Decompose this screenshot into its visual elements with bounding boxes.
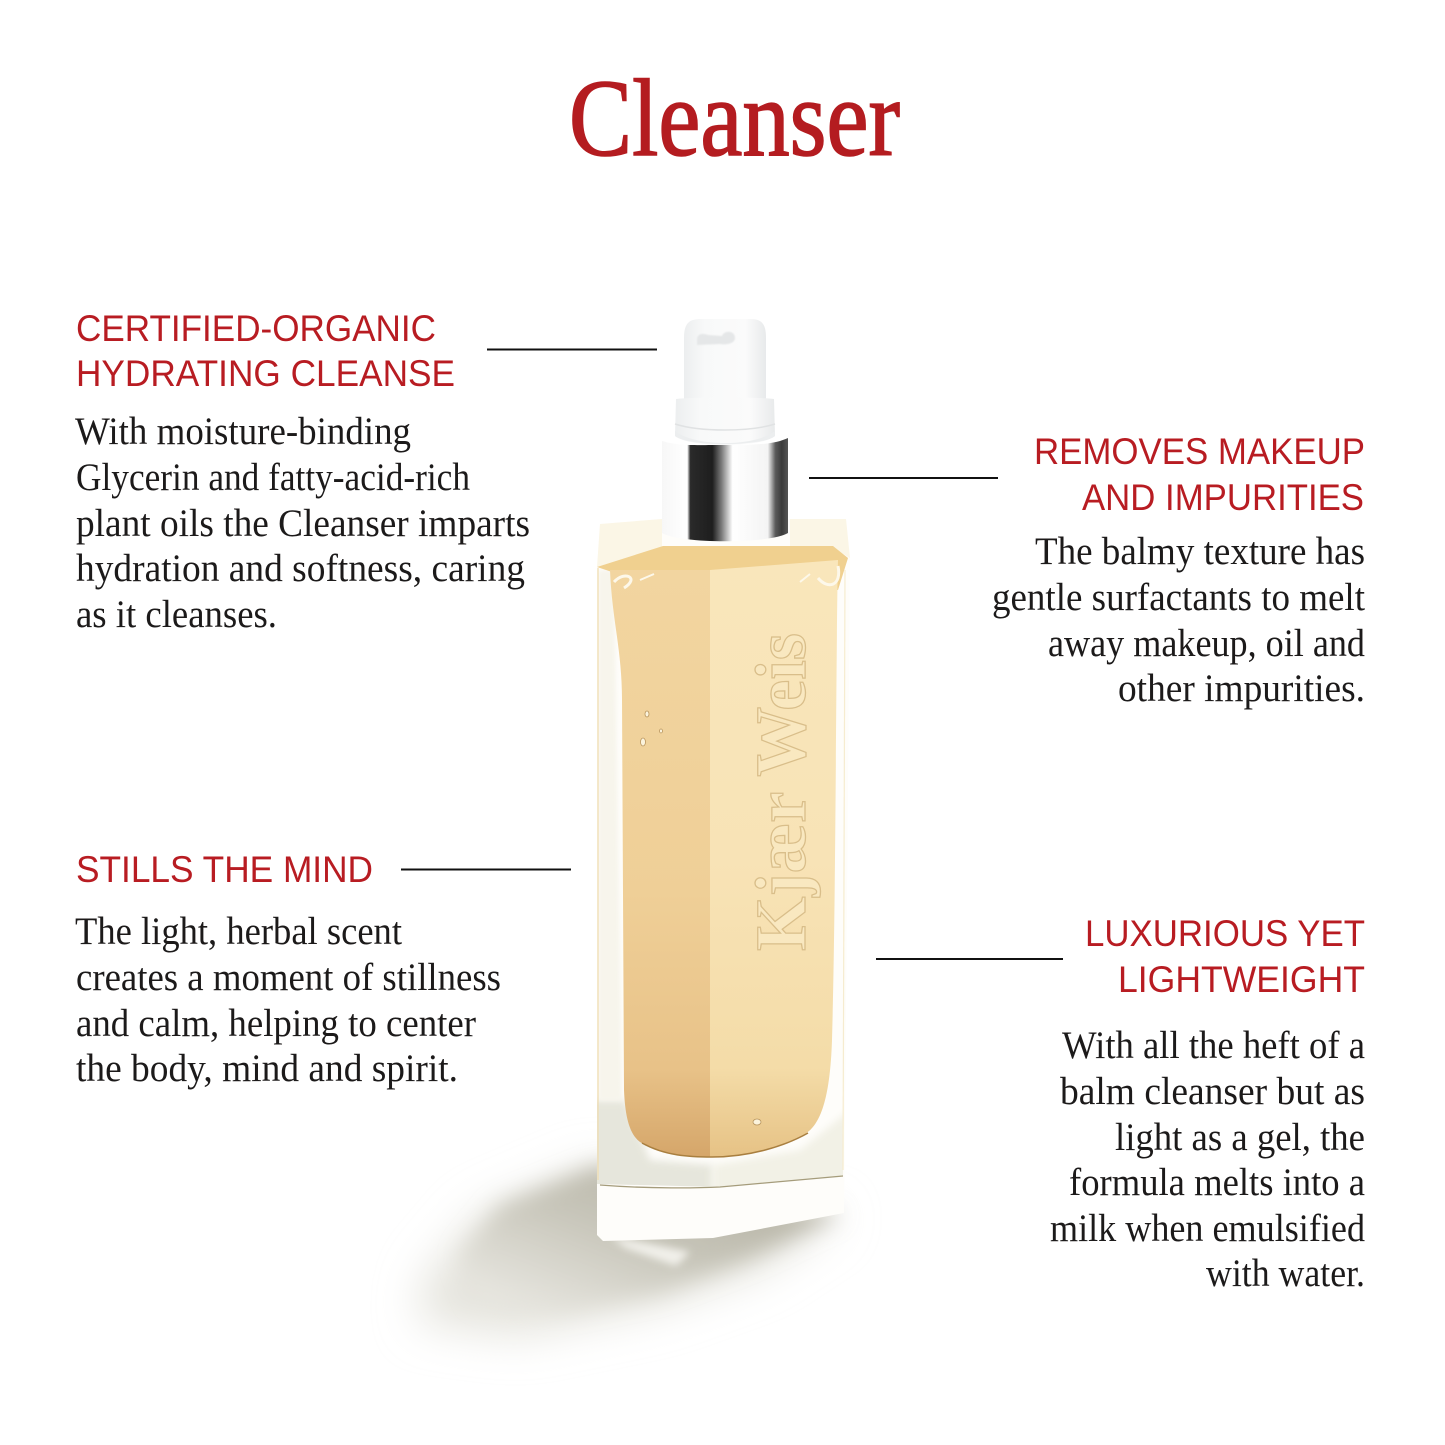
callout: luxurious yet lightweight: balm cleanser but as xyxy=(1060,1070,1365,1113)
callout: certified-organic hydrating cleanse: CERTIFIED-ORGANIC xyxy=(76,308,436,349)
liquid left face xyxy=(610,570,710,1157)
callout: certified-organic hydrating cleanse: HYDRATING CLEANSE xyxy=(76,353,455,394)
embossed brand name: Kjær Weis xyxy=(741,633,821,951)
leader line: luxurious xyxy=(876,958,1063,960)
callout: stills the mind: and calm, helping to center xyxy=(76,1002,476,1045)
liquid top highlights xyxy=(614,566,839,588)
callout: certified-organic hydrating cleanse: as it cleanses. xyxy=(76,593,277,636)
pump collar xyxy=(675,398,775,445)
callout: removes makeup and impurities: away makeup, oil and xyxy=(1048,622,1365,665)
callout: luxurious yet lightweight: light as a gel, the xyxy=(1115,1116,1365,1159)
callout: removes makeup and impurities: other impurities. xyxy=(1118,667,1365,710)
leader line: certified-organic xyxy=(487,348,657,350)
callout: removes makeup and impurities: The balmy texture has xyxy=(1035,530,1365,573)
callout: luxurious yet lightweight: with water. xyxy=(1206,1252,1365,1295)
leader line: removes makeup xyxy=(809,477,998,479)
callout: luxurious yet lightweight: LIGHTWEIGHT xyxy=(1118,959,1365,1000)
callout: certified-organic hydrating cleanse xyxy=(75,308,530,636)
callout: stills the mind: The light, herbal scent xyxy=(75,910,402,953)
callout: stills the mind: STILLS THE MIND xyxy=(76,849,373,890)
callout: certified-organic hydrating cleanse: hydration and softness, caring xyxy=(76,547,525,590)
callout: luxurious yet lightweight: milk when emulsified xyxy=(1050,1207,1365,1250)
bubbles xyxy=(640,711,761,1125)
metal collar xyxy=(662,438,788,541)
callout: certified-organic hydrating cleanse: With moisture-binding xyxy=(75,410,411,453)
liquid back shoulder xyxy=(597,546,848,590)
callout: luxurious yet lightweight: With all the heft of a xyxy=(1062,1024,1365,1067)
title: Cleanser xyxy=(569,57,900,179)
leader line: stills the mind xyxy=(401,868,571,870)
callout: certified-organic hydrating cleanse: Glycerin and fatty-acid-rich xyxy=(76,456,470,499)
callout: stills the mind: the body, mind and spirit. xyxy=(76,1047,458,1090)
callout: luxurious yet lightweight xyxy=(1050,913,1365,1295)
glass lower tint xyxy=(590,570,850,1195)
callout: stills the mind: creates a moment of stillness xyxy=(76,956,501,999)
pump nozzle xyxy=(684,319,766,400)
callout: removes makeup and impurities: AND IMPURITIES xyxy=(1082,477,1364,518)
callout: luxurious yet lightweight: formula melts into a xyxy=(1069,1161,1365,1204)
callout: luxurious yet lightweight: LUXURIOUS YET xyxy=(1085,913,1365,954)
glass body xyxy=(597,519,850,1241)
glass edge lines xyxy=(597,568,599,1180)
callout: removes makeup and impurities: REMOVES MAKEUP xyxy=(1034,431,1365,472)
liquid right face xyxy=(710,560,838,1157)
product bottle xyxy=(590,319,850,1241)
liquid bottom edge xyxy=(642,1133,808,1157)
callout: removes makeup and impurities: gentle surfactants to melt xyxy=(992,576,1365,619)
callout: stills the mind xyxy=(75,849,501,1090)
callout: certified-organic hydrating cleanse: plant oils the Cleanser imparts xyxy=(76,502,530,545)
glass base edge line xyxy=(600,1176,843,1188)
product shadow xyxy=(420,1165,842,1335)
callout: removes makeup and impurities xyxy=(992,431,1365,710)
